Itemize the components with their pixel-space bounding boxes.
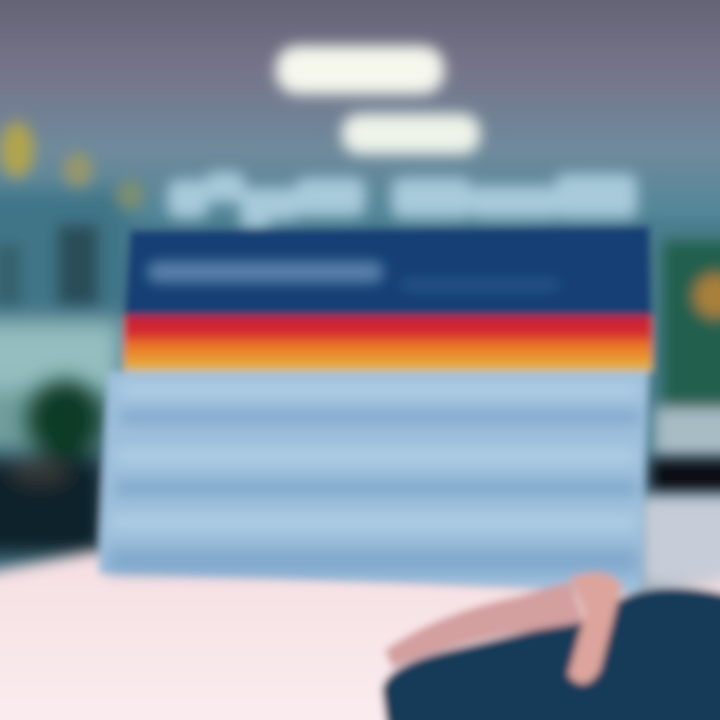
table rows light (110, 382, 640, 530)
yellow wall lights (0, 122, 144, 210)
colour bands (124, 316, 652, 372)
background: ceiling (0, 0, 720, 220)
left wall panel (0, 190, 130, 450)
header text blur (148, 262, 560, 290)
ceiling light 1 (276, 46, 444, 94)
plant (0, 380, 105, 556)
table rows (108, 410, 640, 574)
hand (385, 573, 622, 684)
dashboard board (98, 226, 652, 592)
board title blur (168, 172, 637, 228)
right green board (655, 240, 720, 456)
right black strip (650, 458, 720, 494)
table (0, 552, 720, 720)
sleeve (382, 588, 720, 720)
right pale wall (640, 496, 720, 586)
left wall dark frames (0, 225, 98, 305)
board body (98, 372, 648, 592)
ceiling light 2 (342, 114, 480, 154)
navy header (124, 226, 652, 318)
background: wall (0, 218, 720, 598)
